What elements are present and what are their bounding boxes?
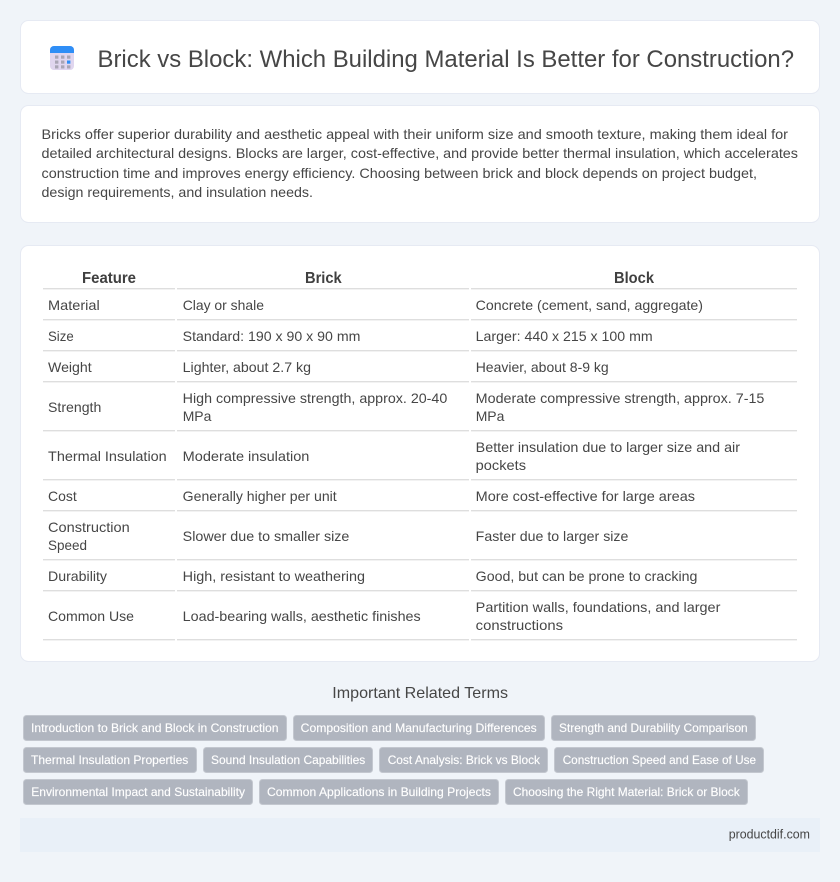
table row: common use: Partition walls, foundations, and larger: [476, 599, 721, 615]
table row: common use: Load-bearing walls, aesthetic finishes: [183, 608, 421, 624]
text block: introduction paragraph: design requirements, and insulation needs.: [42, 184, 313, 200]
tag: [552, 716, 756, 740]
tag: [204, 748, 372, 772]
tag: Sound Insulation Capabilities: [211, 753, 365, 767]
tag: Composition and Manufacturing Differences: [301, 721, 537, 735]
tag: Common Applications in Building Projects: [267, 785, 491, 799]
table row: durability: Good, but can be prone to cracking: [476, 568, 697, 584]
table row: durability: Durability: [48, 568, 107, 584]
tag: Choosing the Right Material: Brick or Block: [513, 785, 741, 799]
tag: [294, 716, 544, 740]
text block: introduction paragraph: [42, 126, 798, 200]
tag: Environmental Impact and Sustainability: [31, 785, 245, 799]
table row: thermal insulation: Better insulation due to larger size and air: [476, 439, 740, 455]
table row: material: [43, 297, 797, 320]
table row: strength: MPa: [183, 408, 212, 424]
table row: construction speed: Speed: [48, 537, 87, 553]
table row: size: Size: [48, 328, 74, 344]
panel: introduction: [20, 106, 820, 222]
table row: construction speed: Slower due to smaller size: [183, 528, 350, 544]
table row: cost: Cost: [48, 488, 77, 504]
text block: introduction paragraph: detailed architectural designs. Blocks are larger, cost-effective, and provide better thermal insulation, which accelerates: [42, 145, 798, 161]
table row: strength: MPa: [476, 408, 505, 424]
tag: Cost Analysis: Brick vs Block: [388, 753, 541, 767]
table row: cost: Generally higher per unit: [183, 488, 337, 504]
table row: thermal insulation: [43, 439, 797, 480]
table row: strength: [43, 390, 797, 431]
table row: common use: constructions: [476, 617, 563, 633]
table row: size: [43, 328, 797, 351]
table row: durability: [43, 568, 797, 591]
table row: weight: [43, 359, 797, 382]
tag: Introduction to Brick and Block in Construction: [31, 721, 278, 735]
table row: size: Larger: 440 x 215 x 100 mm: [476, 328, 653, 344]
table row: construction speed: Construction: [48, 519, 130, 535]
tag: Strength and Durability Comparison: [559, 721, 748, 735]
tag list: related terms: [24, 716, 764, 804]
tag: [24, 780, 252, 804]
table row: thermal insulation: Moderate insulation: [183, 448, 309, 464]
table row: weight: Heavier, about 8-9 kg: [476, 359, 609, 375]
table row: thermal insulation: pockets: [476, 457, 526, 473]
panel: title header: [20, 20, 820, 94]
tag: [506, 780, 748, 804]
table row: construction speed: Faster due to larger size: [476, 528, 629, 544]
table row: material: Material: [48, 297, 100, 313]
tag: [24, 716, 286, 740]
table row: cost: [43, 488, 797, 511]
table header row: Brick: [305, 270, 342, 287]
heading: important related terms: Important Related Terms: [332, 685, 508, 702]
text block: introduction paragraph: Bricks offer superior durability and aesthetic appeal with their uniform size and smooth texture, making them ideal for: [42, 126, 788, 142]
text block: introduction paragraph: construction time and improves energy efficiency. Choosing between brick and block depends on project budget,: [42, 165, 757, 181]
table row: strength: Moderate compressive strength, approx. 7-15: [476, 390, 765, 406]
table row: strength: Strength: [48, 399, 101, 415]
tag: [260, 780, 498, 804]
tag: [24, 748, 196, 772]
table row: size: Standard: 190 x 90 x 90 mm: [183, 328, 360, 344]
tag: Thermal Insulation Properties: [31, 753, 188, 767]
table row: common use: [43, 599, 797, 640]
table row: material: Concrete (cement, sand, aggregate): [476, 297, 703, 313]
table row: material: Clay or shale: [183, 297, 264, 313]
table row: weight: Weight: [48, 359, 92, 375]
table row: thermal insulation: Thermal Insulation: [48, 448, 167, 464]
table row: durability: High, resistant to weathering: [183, 568, 365, 584]
table row: common use: Common Use: [48, 608, 134, 624]
table row: cost: More cost-effective for large areas: [476, 488, 695, 504]
footer source text: productdif.com: [729, 828, 810, 842]
table row: weight: Lighter, about 2.7 kg: [183, 359, 311, 375]
tag: [380, 748, 548, 772]
tag: Construction Speed and Ease of Use: [563, 753, 756, 767]
panel: comparison table: [20, 246, 820, 662]
table header row: Block: [614, 270, 654, 287]
tag: [554, 748, 764, 772]
table header row: Feature: [82, 270, 136, 287]
table row: strength: High compressive strength, approx. 20-40: [183, 390, 448, 406]
table header row: [43, 270, 797, 289]
title: Brick vs Block: Which Building Material Is Better for Construction?: [98, 46, 794, 73]
footer bar: [20, 818, 820, 852]
icon: calendar: [50, 46, 74, 70]
table row: construction speed: [43, 519, 797, 560]
